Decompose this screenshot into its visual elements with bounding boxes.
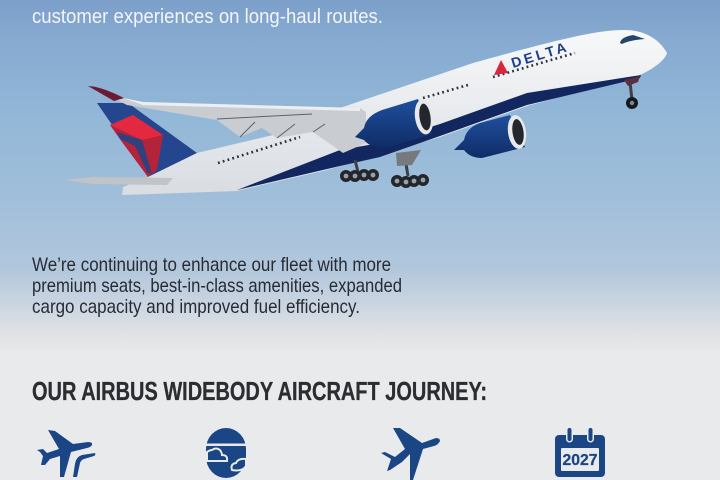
body text: cargo capacity and improved fuel efficiency. <box>32 296 360 318</box>
wing flap details <box>217 114 325 138</box>
icon: airplane <box>381 428 440 480</box>
horizontal stabilizer <box>65 177 173 185</box>
near engine <box>355 98 435 148</box>
body text: premium seats, best-in-class amenities, expanded <box>32 275 402 297</box>
sky background <box>0 0 720 350</box>
icon: calendar 2027 <box>555 428 605 477</box>
window rows <box>218 53 575 163</box>
winglet <box>88 86 124 101</box>
body text: We’re continuing to enhance our fleet with more <box>32 254 391 276</box>
wing <box>88 86 366 153</box>
cockpit windows <box>620 35 645 44</box>
heading: OUR AIRBUS WIDEBODY AIRCRAFT JOURNEY: <box>32 376 487 406</box>
landing gear <box>340 76 640 188</box>
intro text: customer experiences on long-haul routes. <box>32 6 383 28</box>
icon: airplane window with clouds <box>206 428 246 478</box>
icon: plane with tracks <box>37 430 95 477</box>
icon: calendar 2027: 2027 <box>562 452 598 469</box>
body text <box>32 254 402 318</box>
Delta wordmark: DELTA <box>509 38 571 71</box>
fuselage <box>122 30 667 195</box>
tail fin <box>97 103 197 177</box>
airplane photo illustration <box>65 30 667 195</box>
far engine <box>454 114 528 158</box>
wing top highlight <box>123 98 360 111</box>
belly stripe <box>237 75 641 190</box>
Delta red triangle <box>494 60 508 75</box>
lower panel background <box>0 350 720 480</box>
